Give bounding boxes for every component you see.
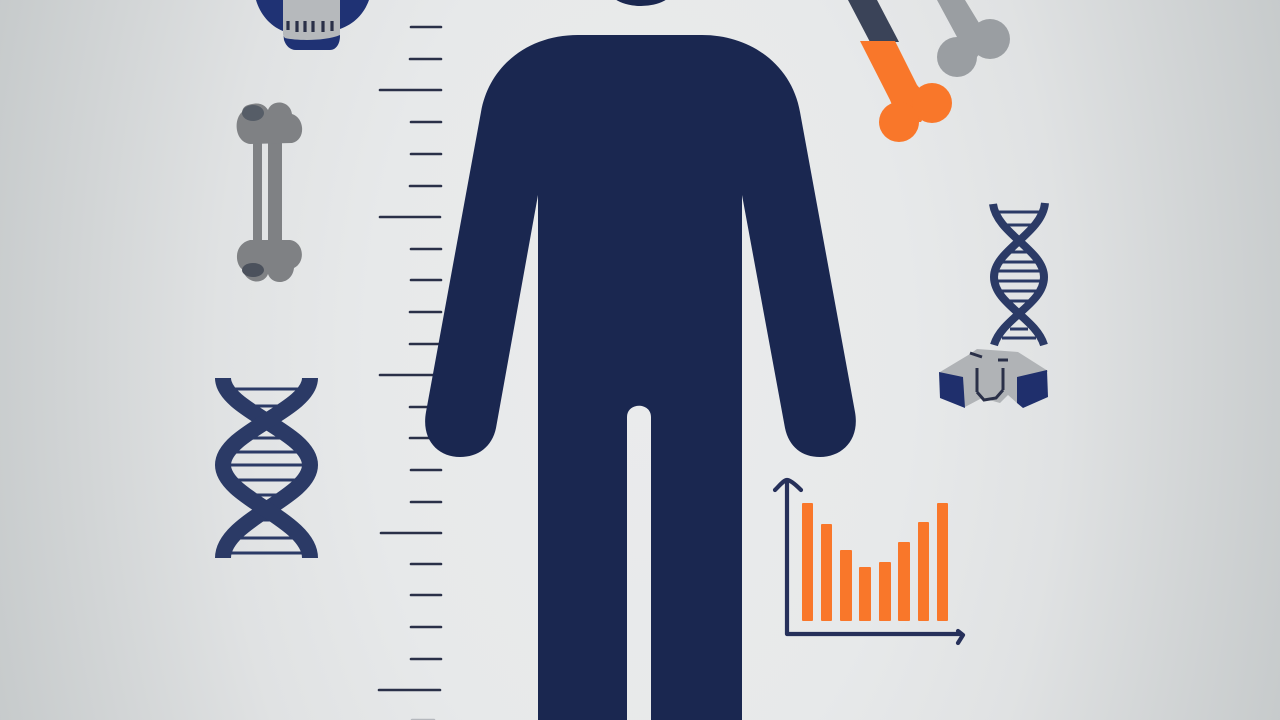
icon: orange bone with handle <box>848 0 952 142</box>
chart axes <box>775 480 963 643</box>
bone dark spots <box>242 105 264 121</box>
icon: vertebra block <box>939 349 1048 408</box>
icon: DNA helix right <box>993 203 1045 345</box>
bone bottom knob <box>237 240 302 282</box>
bar chart <box>775 480 963 643</box>
icon: grey long bone <box>237 103 302 282</box>
vertebra right face <box>1017 370 1048 408</box>
figure head <box>608 0 674 6</box>
vertebra grey top and front <box>940 349 1048 407</box>
DNA strands <box>223 378 310 558</box>
DNA rungs <box>995 212 1043 338</box>
height ruler <box>379 27 441 720</box>
DNA rungs <box>226 389 306 553</box>
chart bars <box>802 503 948 621</box>
icon: skull fragment <box>256 0 369 50</box>
DNA strands <box>993 203 1045 345</box>
dark handle <box>848 0 899 42</box>
bone shafts <box>253 140 262 244</box>
vertebra left face <box>939 372 965 408</box>
bone top knob <box>237 103 302 144</box>
human figure silhouette <box>425 0 856 720</box>
icon: DNA helix left <box>223 378 310 558</box>
figure body <box>425 35 856 720</box>
icon: grey bone <box>937 0 1010 77</box>
orange bone <box>860 41 952 142</box>
vertebra cracks <box>970 353 1008 400</box>
